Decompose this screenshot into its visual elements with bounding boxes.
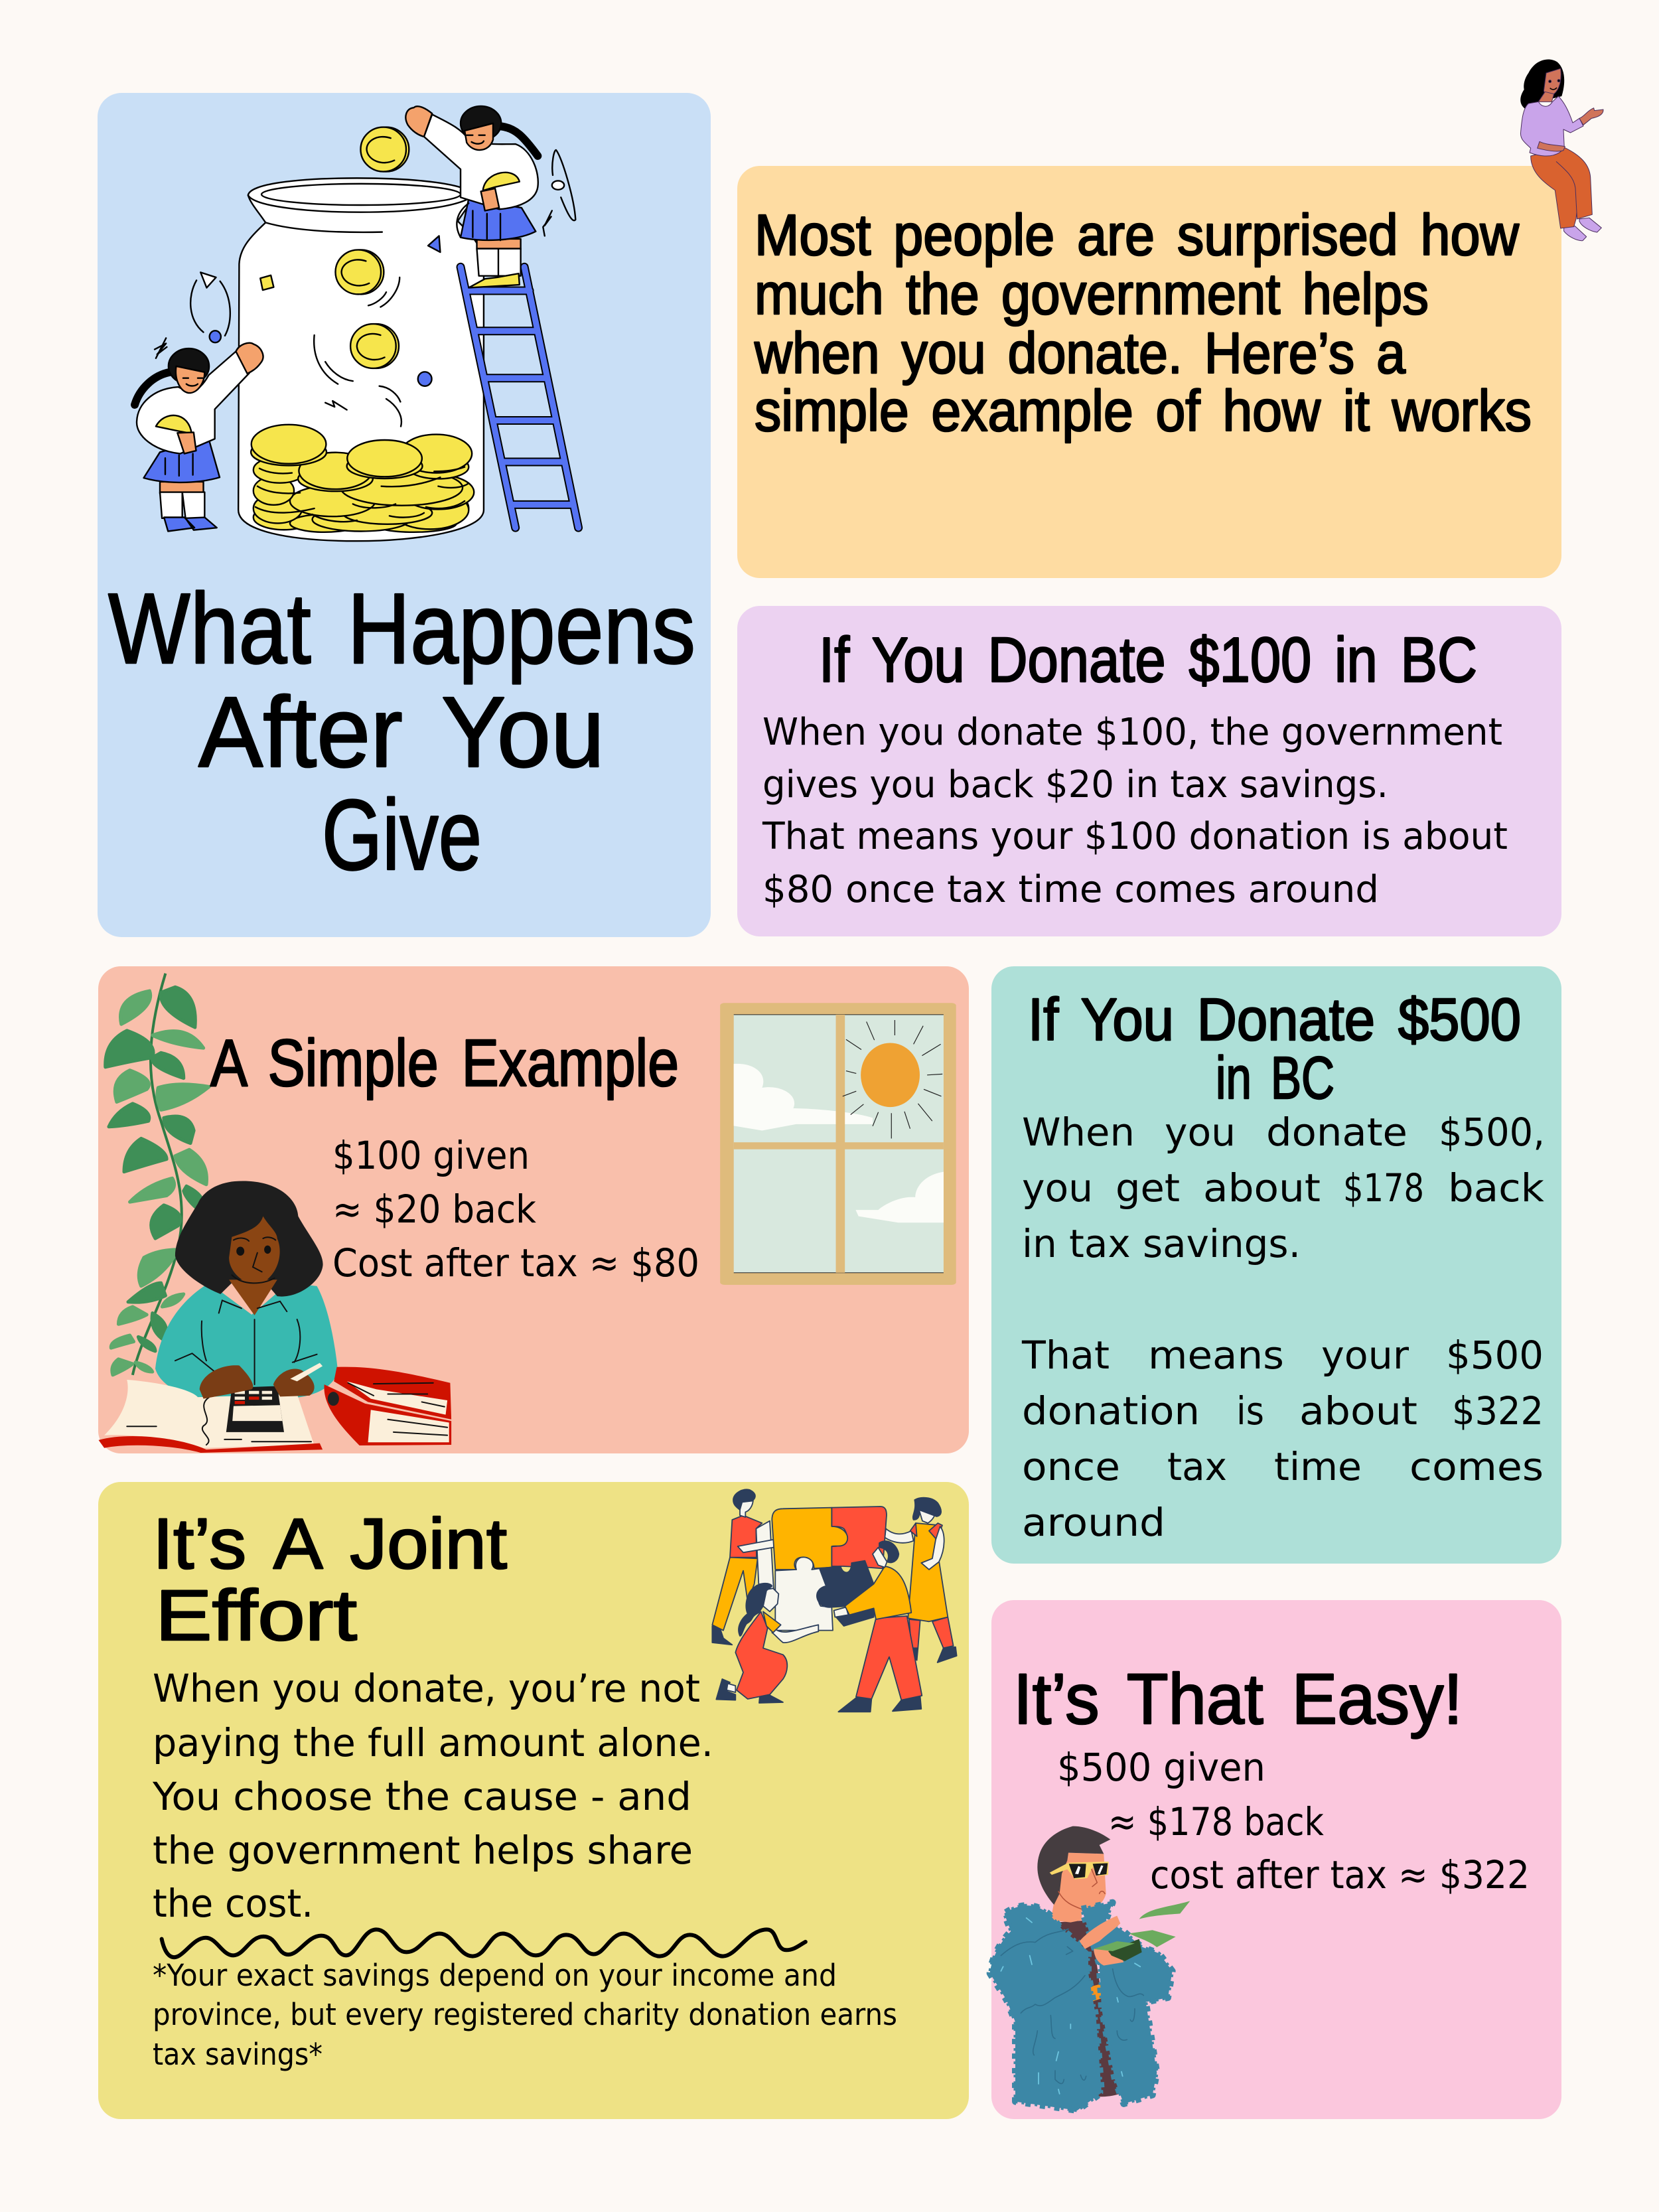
- text block: $500 explanation: about: [1299, 1388, 1417, 1434]
- icon: puzzle pieces: [772, 1507, 887, 1631]
- title: What Happens After You Give: What Happens: [108, 572, 695, 684]
- footnote: [153, 1958, 897, 2072]
- text block: $500 summary: ≈ $178 back: [1108, 1799, 1324, 1844]
- text block: shared cost explanation: the cost.: [153, 1881, 313, 1926]
- text block: shared cost explanation: [152, 1666, 713, 1926]
- heading: A Simple Example: [210, 1026, 679, 1100]
- footnote: province, but every registered charity donation earns: [153, 1997, 897, 2032]
- text block: intro statement: Most people are surprised how: [755, 203, 1520, 267]
- text block: example numbers: [332, 1133, 699, 1286]
- figure: standing person front: [834, 1541, 922, 1712]
- text block: $500 explanation: around: [1022, 1500, 1165, 1545]
- text block: intro statement: much the government helps: [755, 262, 1429, 327]
- figure: standing person right: [885, 1498, 957, 1662]
- title: What Happens After You Give: After You: [198, 676, 605, 788]
- panel: it's that easy: [990, 1600, 1561, 2119]
- figure: girl on the ladder: [405, 106, 538, 288]
- text block: $100 explanation: $80 once tax time comes around: [762, 868, 1379, 911]
- icon: falling coins: [314, 127, 409, 426]
- text block: $500 summary: cost after tax ≈ $322: [1150, 1852, 1530, 1897]
- heading: [153, 1503, 507, 1655]
- text block: $100 explanation: gives you back $20 in tax savings.: [762, 763, 1388, 806]
- figure: girl on the ground: [135, 343, 263, 531]
- illustration: man in fur coat with cash: [990, 1826, 1190, 2110]
- text block: example numbers: Cost after tax ≈ $80: [332, 1240, 699, 1286]
- text block: $500 explanation: get: [1116, 1165, 1180, 1211]
- icon: glass jar: [238, 178, 484, 541]
- icon: coin pile: [251, 425, 474, 532]
- text block: $500 explanation: in tax savings.: [1022, 1221, 1301, 1266]
- text block: example numbers: ≈ $20 back: [332, 1187, 536, 1232]
- text block: $500 explanation: [1021, 1110, 1545, 1545]
- title: What Happens After You Give: [108, 572, 695, 891]
- text block: shared cost explanation: You choose the cause - and: [152, 1774, 691, 1819]
- panel: introduction: [737, 166, 1561, 578]
- figure: woman sitting on the panel: [1520, 59, 1603, 241]
- heading: [1028, 987, 1521, 1112]
- text block: $500 summary: [1057, 1745, 1530, 1897]
- text block: shared cost explanation: When you donate, you’re not: [153, 1666, 700, 1711]
- text block: $100 explanation: That means your $100 donation is about: [762, 815, 1508, 858]
- text block: $500 explanation: tax: [1167, 1444, 1227, 1489]
- figure: standing person left: [712, 1489, 780, 1645]
- panel: if you donate $500: [991, 966, 1561, 1564]
- text block: $500 explanation: about: [1203, 1165, 1321, 1211]
- illustration: woman with calculator and folders: [99, 1181, 451, 1453]
- text block: intro statement: [754, 203, 1532, 443]
- text block: $500 explanation: comes: [1409, 1444, 1544, 1489]
- text block: intro statement: simple example of how it works: [755, 379, 1532, 443]
- panel: a simple example: [98, 966, 969, 1453]
- text block: $500 explanation: donation: [1022, 1388, 1200, 1434]
- title: What Happens After You Give: Give: [322, 778, 482, 891]
- text block: $500 summary: $500 given: [1057, 1745, 1265, 1790]
- text block: $500 explanation: your: [1321, 1333, 1409, 1378]
- heading: in BC: [1216, 1045, 1334, 1112]
- heading: Effort: [155, 1575, 357, 1655]
- figure: kneeling person: [716, 1584, 818, 1703]
- illustration: window with sun and clouds: [720, 1003, 956, 1285]
- text block: $500 explanation: When: [1022, 1110, 1135, 1155]
- text block: example numbers: $100 given: [332, 1133, 530, 1178]
- heading: If You Donate $500: [1028, 987, 1521, 1053]
- illustration: girls filling a coin jar: [135, 106, 579, 541]
- text block: $500 explanation: donate: [1266, 1110, 1407, 1155]
- text block: $500 explanation: $322: [1452, 1388, 1544, 1434]
- text block: $100 explanation: [762, 711, 1508, 911]
- footnote: *Your exact savings depend on your income and: [153, 1958, 837, 1993]
- text block: $500 explanation: That: [1021, 1333, 1110, 1378]
- heading: If You Donate $100 in BC: [819, 625, 1477, 696]
- text block: $500 explanation: back: [1448, 1165, 1544, 1211]
- text block: $500 explanation: once: [1022, 1444, 1120, 1489]
- icon: confetti shapes: [155, 150, 575, 386]
- text block: shared cost explanation: the government helps share: [153, 1828, 693, 1873]
- panel: title: [98, 93, 711, 937]
- panel: it's a joint effort: [98, 1482, 969, 2119]
- text block: $500 explanation: means: [1148, 1333, 1284, 1378]
- text block: $500 explanation: you: [1165, 1110, 1236, 1155]
- illustration: climbing vine: [106, 974, 209, 1375]
- text block: $500 explanation: is: [1236, 1388, 1264, 1434]
- footnote: tax savings*: [153, 2037, 323, 2072]
- text block: $500 explanation: $500: [1446, 1333, 1544, 1378]
- text block: $500 explanation: $178: [1343, 1165, 1424, 1211]
- text block: $500 explanation: you: [1022, 1165, 1093, 1211]
- panel: if you donate $100: [737, 606, 1561, 936]
- heading: It’s That Easy!: [1013, 1659, 1463, 1739]
- heading: It’s A Joint: [153, 1503, 507, 1584]
- text block: $500 explanation: $500,: [1439, 1110, 1545, 1155]
- illustration: team assembling puzzle: [712, 1489, 957, 1712]
- text block: intro statement: when you donate. Here’s a: [754, 321, 1406, 386]
- wavy divider: [162, 1929, 806, 1957]
- text block: shared cost explanation: paying the full amount alone.: [153, 1720, 713, 1765]
- text block: $500 explanation: time: [1274, 1444, 1362, 1489]
- icon: blue ladder: [461, 267, 579, 528]
- text block: $100 explanation: When you donate $100, the government: [762, 711, 1502, 754]
